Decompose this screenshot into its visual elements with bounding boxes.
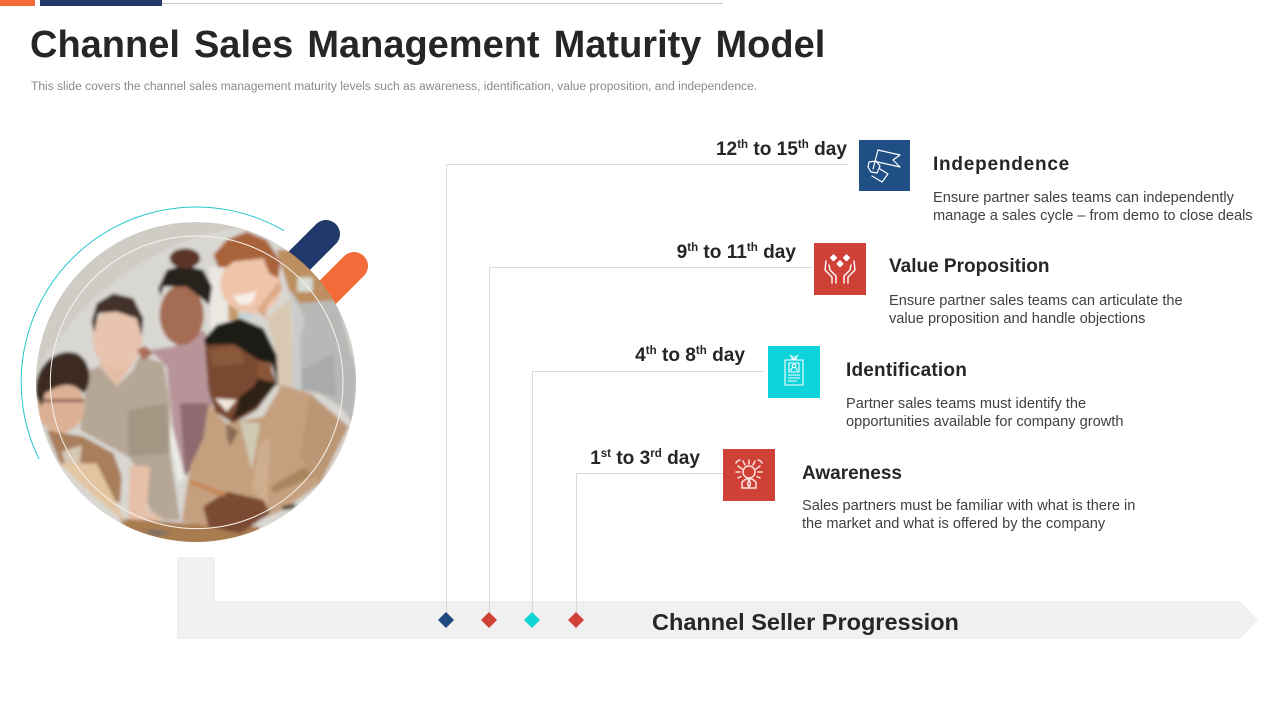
connector lines xyxy=(446,164,848,613)
navy pill xyxy=(287,234,326,273)
text: awareness xyxy=(802,498,1135,532)
teal arc xyxy=(21,207,284,459)
text: awareness: Sales partners must be familiar with what is there in xyxy=(802,498,1135,514)
front man hands and pencil xyxy=(203,492,270,533)
heading: identification: Identification xyxy=(846,360,967,381)
woman with bun face xyxy=(160,285,204,345)
curly haired woman xyxy=(47,430,122,503)
icon: independence flag xyxy=(859,140,910,191)
text: value proposition: Ensure partner sales teams can articulate the xyxy=(889,293,1183,309)
day label: 12th to 15th: 12th to 15th day xyxy=(716,139,847,160)
front man head xyxy=(205,342,277,423)
top accent bars xyxy=(0,0,723,6)
text: independence xyxy=(933,190,1253,224)
day label: 4th to 8th: 4th to 8th day xyxy=(635,345,745,366)
heading: value proposition: Value Proposition xyxy=(889,256,1049,277)
icon: identification badge xyxy=(768,346,820,398)
icon: awareness person xyxy=(723,449,775,501)
text: value proposition xyxy=(889,293,1183,327)
timeline diamond markers xyxy=(438,612,584,628)
day label: 9th to 11th: 9th to 11th day xyxy=(677,242,796,263)
title: Channel Sales Management Maturity Model xyxy=(30,24,825,66)
laptop xyxy=(60,463,126,523)
text: identification xyxy=(846,396,1123,430)
icon: value proposition hands xyxy=(814,243,866,295)
front man jacket xyxy=(180,384,321,526)
heading: awareness: Awareness xyxy=(802,463,902,484)
table xyxy=(119,516,262,542)
woman with bun sweater xyxy=(150,330,212,477)
subtitle: This slide covers the channel sales management maturity levels such as awareness, identification, value proposition, and independence. xyxy=(31,79,757,93)
red haired man jacket xyxy=(290,290,358,423)
woman in sweater body xyxy=(80,355,180,520)
text: identification: Partner sales teams must identify the xyxy=(846,396,1086,412)
orange pill xyxy=(320,266,354,300)
woman in sweater head xyxy=(93,308,142,369)
progression label: Channel Seller Progression xyxy=(652,609,959,635)
photo xyxy=(33,220,360,550)
day label: 1st to 3rd: 1st to 3rd day xyxy=(590,448,700,469)
text: independence: manage a sales cycle – from demo to close deals xyxy=(933,208,1253,224)
bottom arrow band xyxy=(177,557,1258,639)
text: awareness: the market and what is offered by the company xyxy=(802,516,1105,532)
red haired man face xyxy=(218,256,281,315)
text: independence: Ensure partner sales teams can independently xyxy=(933,190,1234,206)
text: identification: opportunities available for company growth xyxy=(846,414,1123,430)
heading: independence: Independence xyxy=(933,154,1070,175)
text: value proposition: value proposition and handle objections xyxy=(889,311,1145,327)
team photo illustration xyxy=(20,206,368,542)
white inner ring xyxy=(50,236,343,529)
